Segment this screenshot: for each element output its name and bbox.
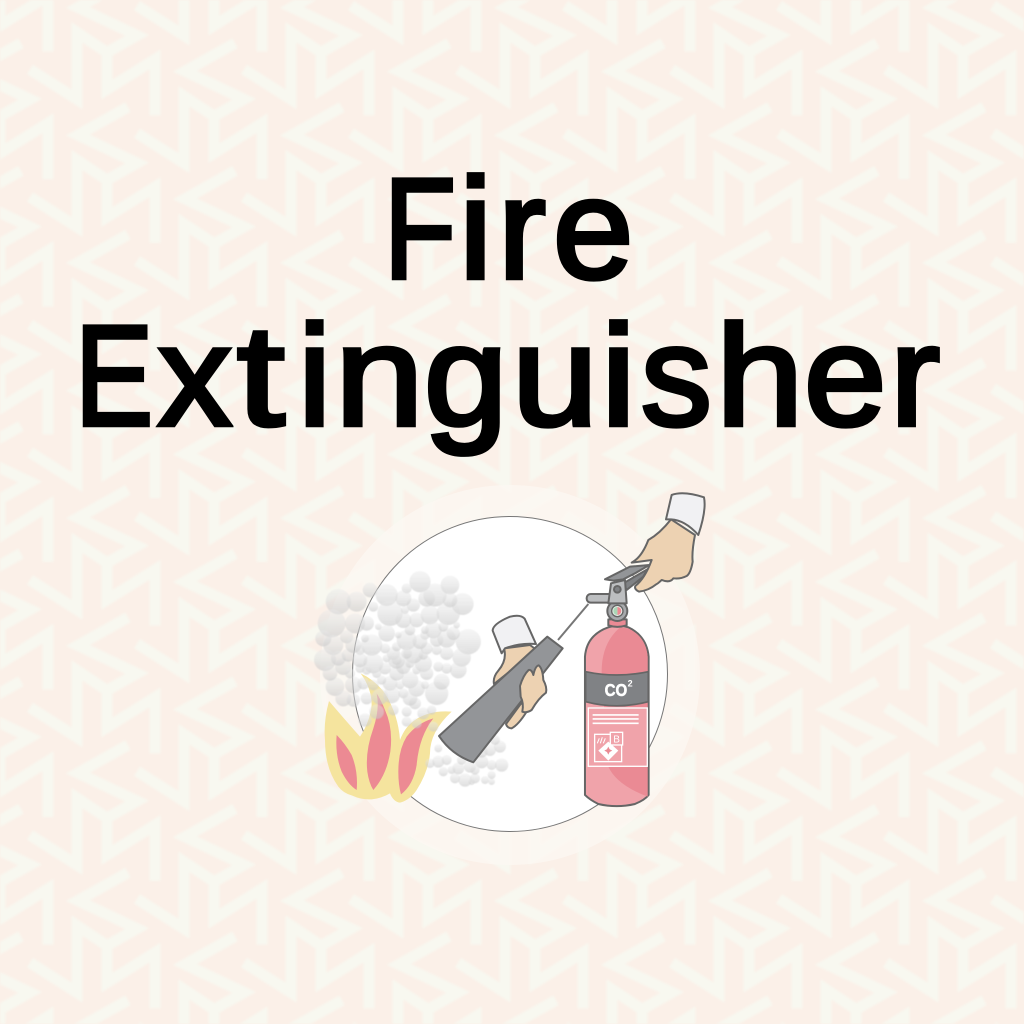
icon: extinguisher cylinder — [585, 626, 649, 806]
title line: Extinguisher: E — [74, 297, 153, 456]
cylinder body — [585, 626, 649, 806]
fingers — [520, 665, 546, 712]
cuff — [493, 616, 536, 653]
title line: Extinguisher: u — [512, 297, 597, 456]
valve column — [608, 580, 627, 603]
icon: flames — [325, 673, 452, 803]
cuff — [666, 493, 705, 535]
title line: Extinguisher — [74, 297, 940, 457]
title line: Extinguisher: e — [804, 297, 887, 456]
title line: Extinguisher: s — [641, 297, 712, 456]
title line: Extinguisher: h — [716, 297, 803, 456]
icon: lower hand holding nozzle — [439, 616, 563, 762]
smoke cloud — [314, 571, 481, 732]
halo circle — [320, 485, 700, 865]
title line: Fire: e — [553, 150, 634, 309]
title line: Fire: r — [498, 150, 546, 309]
valve ring — [607, 601, 627, 621]
upper hand — [632, 519, 695, 592]
hand back — [494, 645, 537, 728]
collar — [608, 619, 627, 627]
cylinder shading — [602, 627, 648, 797]
instruction label — [588, 708, 647, 766]
title line: Extinguisher: g — [424, 297, 508, 456]
illustration: using a CO2 fire extinguisher — [314, 485, 705, 865]
title line: Fire — [384, 150, 634, 309]
nozzle horn — [439, 637, 563, 762]
smoke under nozzle — [425, 735, 508, 787]
title line: Extinguisher: n — [335, 297, 424, 456]
title line: Extinguisher: x — [158, 297, 232, 456]
class letter: B — [613, 734, 620, 745]
lever lower — [623, 569, 647, 590]
title line: Extinguisher: r — [890, 297, 940, 456]
white circle — [352, 516, 668, 832]
title line: Extinguisher: i — [601, 297, 636, 456]
title — [74, 150, 940, 457]
title line: Extinguisher: t — [237, 297, 285, 456]
title line: Fire: i — [459, 150, 493, 309]
label band — [586, 672, 648, 706]
band text: CO — [605, 680, 627, 700]
band superscript: 2 — [628, 679, 633, 689]
hose to valve — [558, 604, 588, 640]
title line: Extinguisher: i — [298, 297, 332, 456]
title line: Fire: F — [384, 150, 456, 309]
outlet stub — [587, 594, 615, 603]
lever upper — [605, 565, 649, 581]
icon: extinguisher valve and upper hand — [558, 493, 705, 640]
